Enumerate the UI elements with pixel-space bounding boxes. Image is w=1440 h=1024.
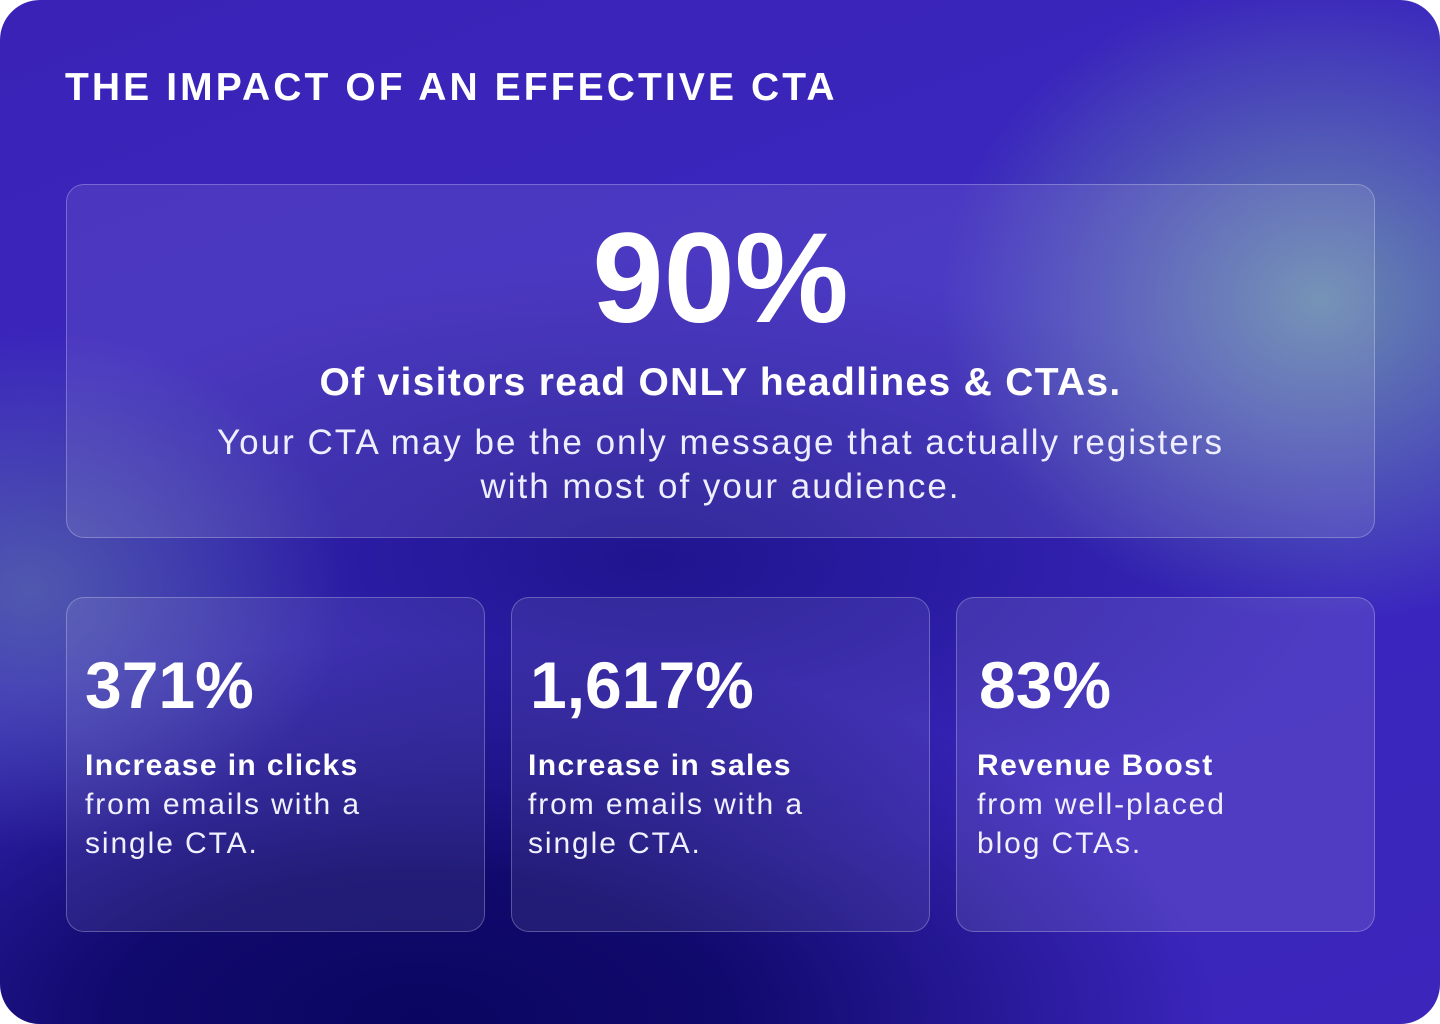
big number 90%: 90%	[592, 207, 849, 350]
label clicks: from emails with a	[85, 788, 361, 821]
subheading: Of visitors read ONLY headlines & CTAs.	[319, 361, 1122, 404]
label revenue	[977, 749, 1226, 860]
label sales: from emails with a	[528, 788, 804, 821]
label sales: Increase in sales	[528, 749, 792, 782]
label clicks: Increase in clicks	[85, 749, 359, 782]
description	[217, 423, 1224, 506]
label clicks: single CTA.	[85, 827, 259, 860]
stat 371%: 371%	[85, 648, 254, 722]
stat 1,617%: 1,617%	[530, 648, 754, 722]
stat 83%: 83%	[979, 648, 1111, 722]
label revenue: blog CTAs.	[977, 827, 1142, 860]
description: with most of your audience.	[480, 467, 961, 506]
label revenue: from well-placed	[977, 788, 1226, 821]
description: Your CTA may be the only message that actually registers	[217, 423, 1224, 462]
panel: sales	[511, 597, 930, 932]
label revenue: Revenue Boost	[977, 749, 1214, 782]
label sales	[528, 749, 804, 860]
label clicks	[85, 749, 361, 860]
panel: headline stat	[66, 184, 1375, 538]
label sales: single CTA.	[528, 827, 702, 860]
panel: clicks	[66, 597, 485, 932]
panel: revenue	[956, 597, 1375, 932]
title: THE IMPACT OF AN EFFECTIVE CTA	[65, 66, 838, 109]
